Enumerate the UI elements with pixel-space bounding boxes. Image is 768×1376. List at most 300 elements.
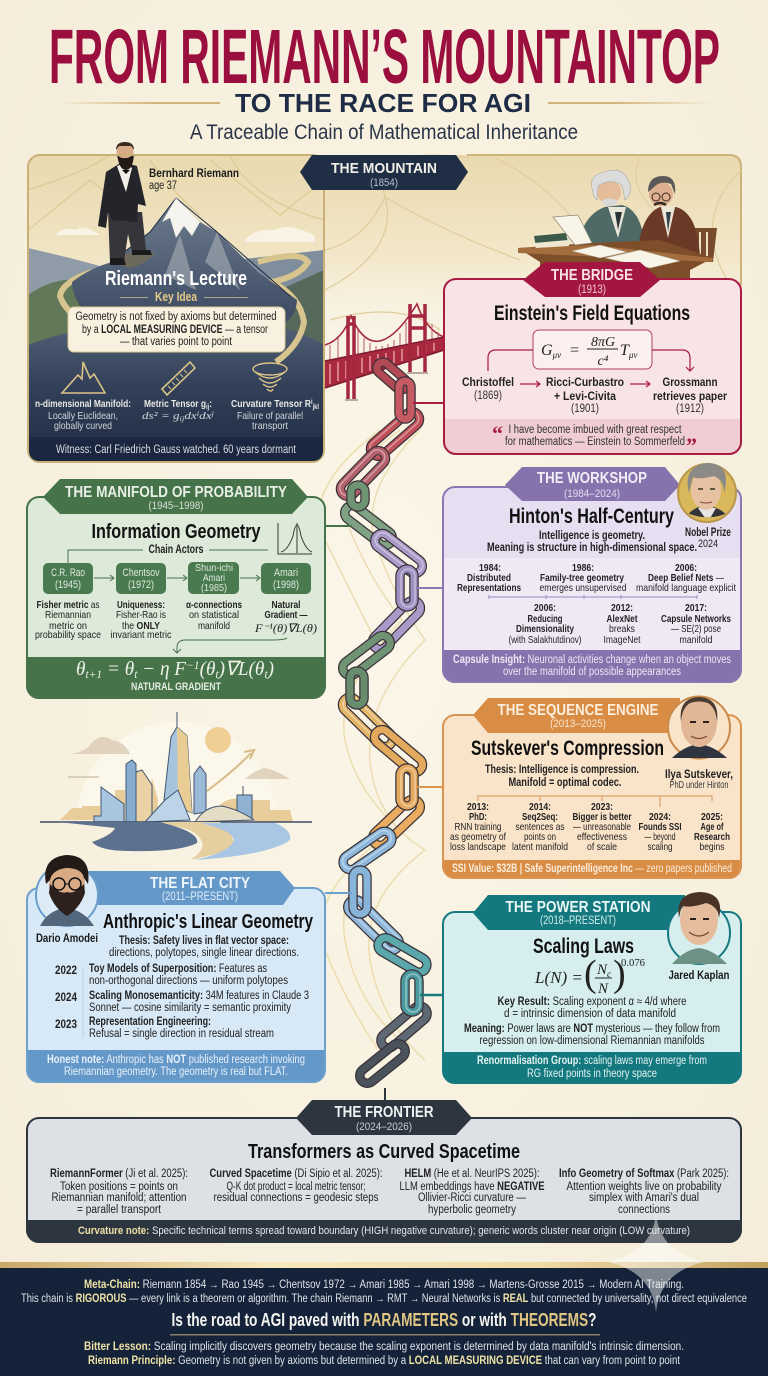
- desc: alpha connections: on statistical: [189, 609, 239, 621]
- event 2025: Age of: [700, 821, 724, 833]
- panel border: [28, 155, 324, 462]
- metric tensor label: j: [210, 410, 214, 418]
- label: Jared Kaplan: Jared Kaplan: [668, 968, 730, 982]
- actor arrows: [94, 575, 260, 581]
- entry 2022: non-orthogonal directions — uniform polytopes: [89, 975, 288, 987]
- witness band: [29, 437, 323, 461]
- link: green second: [340, 633, 393, 678]
- link: teal: [375, 935, 430, 975]
- paper: HELM: [400, 1168, 545, 1216]
- event 2006 belief nets: 2006:: [675, 562, 697, 574]
- distant skyline: [60, 778, 293, 822]
- arrow: [630, 381, 650, 387]
- link: purple vertical: [400, 569, 415, 607]
- actor: Chentsov: [116, 563, 166, 594]
- honest note band text: [47, 1054, 305, 1078]
- divider: [170, 1334, 600, 1336]
- desc: Fisher metric: probability space: [35, 629, 101, 641]
- papers: [553, 215, 592, 245]
- formula: (: [584, 953, 597, 995]
- connector: manifold: [325, 525, 352, 527]
- desc: alpha connections: [186, 599, 242, 632]
- manifold label: [35, 398, 131, 432]
- event 1984: Distributed: [467, 572, 511, 584]
- event 2013: 2013:: [467, 801, 489, 813]
- heading: Riemann's Lecture: [105, 268, 247, 290]
- footer: [0, 1262, 768, 1376]
- quote: “: [492, 421, 503, 446]
- key result: [498, 996, 686, 1020]
- equation box: 8πG: [591, 335, 615, 350]
- step: Christoffel: (1869): [474, 390, 502, 402]
- heading: Sutskever's Compression: [471, 737, 664, 760]
- badge: [88, 871, 295, 905]
- metric tensor label: dx: [184, 411, 197, 422]
- heading: Einstein's Field Equations: [494, 302, 690, 325]
- key idea box: — that varies point to point: [120, 336, 233, 348]
- workshop panel body: [443, 487, 741, 682]
- thesis: Meaning is structure in high-dimensional space.: [487, 540, 697, 554]
- quote: ”: [686, 433, 697, 458]
- formula band text: θ: [76, 658, 86, 680]
- curvature tensor label: Curvature Tensor R: [231, 398, 328, 410]
- paper: Info Geometry of Softmax: Info Geometry of Softmax (Park 2025):: [559, 1168, 729, 1180]
- manifold label: globally curved: [54, 420, 112, 432]
- step: Ricci-Curbastro: Ricci-Curbastro: [546, 375, 624, 389]
- step: Ricci-Curbastro: + Levi-Civita: [554, 389, 616, 403]
- panel: the bridge: [444, 262, 741, 458]
- event 2013: as geometry of: [450, 831, 506, 843]
- event 2023: [572, 801, 632, 853]
- thesis: [109, 935, 299, 959]
- connector: flat city: [325, 892, 352, 894]
- link: purple long: [369, 598, 424, 652]
- entry 2024: Scaling Monosemanticity: 34M features in Claude 3: [89, 990, 309, 1002]
- heading: Anthropic's Linear Geometry: [103, 910, 313, 933]
- capsule insight band text: over the manifold of possible appearances: [503, 666, 681, 678]
- paper: Info Geometry of Softmax: connections: [618, 1204, 670, 1216]
- Grossmann head: [649, 182, 673, 206]
- portrait: Kaplan: [668, 892, 730, 964]
- badge: the bridge: [523, 262, 660, 297]
- manifold panel body: [27, 497, 325, 698]
- sparkle glint: [608, 1214, 704, 1312]
- entry 2023: 2023: [55, 1017, 77, 1031]
- lower ground: [28, 318, 324, 462]
- boots: [110, 250, 152, 265]
- step: Christoffel: Christoffel: [462, 375, 514, 389]
- chain actors label: Chain Actors: [148, 544, 204, 556]
- quote: for mathematics — Einstein to Sommerfeld: [505, 436, 685, 448]
- formula band text: (θ: [200, 658, 216, 680]
- event 2014: [512, 801, 568, 853]
- equation box: μν: [628, 350, 637, 360]
- key result: d = intrinsic dimension of data manifold: [504, 1008, 676, 1020]
- badge: (1984–2024): [564, 488, 620, 500]
- equation box: =: [570, 342, 579, 359]
- equation box: c⁴: [597, 354, 609, 369]
- badge: (2024–2026): [356, 1121, 412, 1133]
- badge: [505, 467, 680, 501]
- capsule insight band text: [453, 654, 731, 678]
- desc: Fisher metric: Fisher metric as: [36, 599, 100, 611]
- paper: Curved Spacetime: [210, 1168, 382, 1204]
- desc: Natural Gradient: F⁻¹(θ)∇L(θ): [254, 621, 317, 635]
- paper: RiemannFormer: Token positions = points on: [60, 1181, 178, 1193]
- badge: the mountain: [300, 155, 468, 190]
- Grossmann jacket: [637, 207, 700, 258]
- actor: Shun-ichi Amari: Amari: [203, 572, 225, 584]
- illustration: flat city skyline: [40, 712, 312, 860]
- formula: L(N) =: [534, 968, 583, 987]
- actor: Chentsov: Chentsov: [122, 567, 160, 579]
- chain tail to frontier: [384, 1088, 386, 1104]
- link: rose: [337, 447, 389, 499]
- chain background ribbons: [319, 430, 425, 1060]
- paper: Curved Spacetime: Curved Spacetime (Di Sipio et al. 2025):: [210, 1168, 382, 1180]
- event 2012: 2012:: [611, 602, 633, 614]
- thesis: [485, 762, 639, 789]
- SSI band text: SSI Value: $32B | Safe Superintelligence Inc — zero papers published: [452, 863, 732, 875]
- honest note band text: Riemannian geometry. The geometry is real but FLAT.: [64, 1066, 288, 1078]
- portrait: Hinton: [678, 463, 736, 524]
- actor: Shun-ichi Amari: Shun-ichi: [195, 562, 233, 574]
- equation box: T: [620, 342, 629, 359]
- event 2013: [450, 801, 506, 853]
- desc: Natural Gradient: [254, 599, 317, 635]
- link: gray first: [378, 1003, 430, 1051]
- badge: (2011–PRESENT): [162, 891, 238, 903]
- equation box: [533, 330, 652, 369]
- link: orange second: [371, 727, 426, 775]
- desc: Natural Gradient: Natural: [272, 599, 301, 611]
- formula band text: )∇L(θ: [218, 658, 265, 680]
- event 2014: Seq2Seq:: [522, 811, 558, 823]
- left towers: [126, 760, 136, 822]
- desk: [518, 240, 713, 285]
- thesis: Thesis: Safety lives in flat vector space:: [119, 935, 289, 947]
- event 2024: [638, 811, 682, 853]
- meaning: Meaning: Power laws are NOT mysterious — they follow from: [464, 1023, 720, 1035]
- formula band text: −1: [186, 658, 200, 672]
- blue water: [195, 823, 290, 860]
- icon: manifold mountain: [62, 362, 105, 393]
- small right tower: [237, 786, 252, 818]
- event 2023: Bigger is better: [572, 811, 632, 823]
- icon: bell curve: [278, 523, 312, 554]
- event 2006 reducing: (with Salakhutdinov): [508, 634, 582, 646]
- desc: Uniqueness: invariant metric: [110, 629, 172, 641]
- thesis: Manifold = optimal codec.: [508, 775, 622, 789]
- portrait: Dario Amodei: [36, 855, 98, 926]
- badge: the mountain: (1854): [370, 177, 398, 189]
- entry 2024: 2024: [55, 990, 77, 1004]
- actor: C.R. Rao: (1945): [55, 579, 81, 591]
- bridge towers: [348, 304, 425, 400]
- event 2023: 2023:: [591, 801, 613, 813]
- link: green vertical: [351, 485, 365, 507]
- figure head (rises above panel): [116, 142, 134, 170]
- event 2006 belief nets: [636, 562, 736, 594]
- label: age: age 37: [149, 180, 177, 192]
- link: green: [342, 503, 395, 548]
- actor: Shun-ichi Amari: [188, 562, 239, 594]
- clouds: [70, 737, 290, 779]
- step: Ricci-Curbastro: (1901): [571, 403, 599, 415]
- event 1986: 1986:: [572, 562, 594, 574]
- paper: RiemannFormer: = parallel transport: [77, 1204, 162, 1216]
- curvature tensor label: i: [311, 399, 313, 406]
- entry 2022: 2022: [55, 963, 77, 977]
- entry 2023: [55, 1016, 274, 1040]
- renormalisation band text: [477, 1055, 707, 1080]
- books: [534, 233, 568, 247]
- event 1986: Family-tree geometry: [540, 572, 624, 584]
- glow: [77, 722, 277, 822]
- renormalisation band text: RG fixed points in theory space: [527, 1068, 657, 1080]
- label: Dario Amodei: Dario Amodei: [36, 931, 98, 945]
- link: orange vertical: [400, 768, 415, 806]
- connector: bridge: [413, 402, 444, 404]
- nobel label: Nobel Prize: [685, 527, 731, 539]
- event 2023: of scale: [587, 841, 617, 853]
- desc: Uniqueness: Uniqueness:: [117, 599, 165, 611]
- formula: [534, 953, 645, 997]
- link: blue first: [340, 828, 395, 873]
- event 2023: effectiveness: [577, 831, 627, 843]
- event 1986: [540, 562, 627, 594]
- event 1984: Representations: [457, 582, 521, 594]
- step: Christoffel: [462, 375, 514, 402]
- badge: [43, 479, 308, 514]
- formula band text: t: [215, 667, 219, 681]
- mountain panel body: [28, 155, 324, 462]
- heading rule right: [548, 102, 713, 104]
- event 2023: — unreasonable: [573, 821, 631, 833]
- paper: HELM: HELM (He et al. NeurIPS 2025):: [404, 1168, 540, 1180]
- name label: [665, 767, 733, 791]
- power panel body: [443, 912, 741, 1083]
- step: Grossmann: (1912): [676, 403, 704, 415]
- meaning: regression on low-dimensional Riemannian manifolds: [480, 1035, 705, 1047]
- badge: THE POWER STATION: [506, 899, 650, 916]
- event 2006 reducing: Dimensionality: [516, 623, 574, 635]
- event 2012: ImageNet: [604, 634, 641, 646]
- actor: Amari: [261, 563, 311, 594]
- desc: alpha connections: α-connections: [186, 599, 242, 611]
- bitter lesson: Bitter Lesson: Scaling implicitly discovers geometry because the scaling exponent is determined by data manifold's intrinsic dimension.: [84, 1341, 684, 1353]
- panel: the workshop: [443, 463, 741, 682]
- event 2025: 2025:: [701, 811, 723, 823]
- desc: Fisher metric: [35, 599, 101, 641]
- question: Is the road to AGI paved with PARAMETERS or with THEOREMS?: [172, 1309, 596, 1330]
- badge: the bridge: (1913): [578, 284, 606, 296]
- entry 2023: Representation Engineering:: [89, 1016, 211, 1028]
- chair: [695, 228, 717, 262]
- link: orange third: [370, 796, 423, 849]
- step: Grossmann: Grossmann: [662, 375, 718, 389]
- metric tensor label: ij: [180, 415, 184, 423]
- honest note band text: Honest note: Anthropic has NOT published research invoking: [47, 1054, 305, 1066]
- badge: THE MANIFOLD OF PROBABILITY: [65, 484, 288, 501]
- connector: sequence: [416, 786, 443, 788]
- arrow: [207, 750, 254, 791]
- desc: Uniqueness: the ONLY: [122, 620, 160, 632]
- event 2014: points on: [524, 831, 556, 843]
- dark road: [58, 822, 197, 851]
- portrait: Sutskever: [668, 696, 730, 758]
- desc: Uniqueness: Fisher-Rao is: [116, 609, 166, 621]
- paper: Info Geometry of Softmax: simplex with Amari's dual: [589, 1192, 699, 1204]
- event 2025: [694, 811, 730, 853]
- arrow to natural gradient formula: [173, 638, 287, 653]
- event 2024: Founds SSI: [638, 821, 682, 833]
- desc: Fisher metric: Riemannian: [45, 609, 91, 621]
- formula: ): [613, 953, 626, 995]
- event 2006 belief nets: manifold language explicit: [636, 582, 736, 594]
- icon: curvature tornado: [253, 363, 287, 391]
- main tower: [164, 712, 192, 813]
- equation box: G: [541, 342, 553, 359]
- formula band text: t+1: [85, 667, 102, 681]
- horizon: [40, 821, 312, 823]
- link: teal vertical: [405, 974, 420, 1012]
- curvature tensor label: transport: [252, 420, 288, 432]
- quote: [492, 421, 697, 458]
- bridge deck: [325, 337, 444, 388]
- link: red bridge link: [374, 360, 410, 392]
- gold stripe: [0, 1262, 768, 1268]
- event 2014: 2014:: [529, 801, 551, 813]
- tagline: A Traceable Chain of Mathematical Inheritance: [190, 121, 578, 144]
- renormalisation band text: Renormalisation Group: scaling laws may emerge from: [477, 1055, 707, 1067]
- formula band text: t: [134, 667, 138, 681]
- formula: c: [607, 969, 611, 979]
- actor: C.R. Rao: C.R. Rao: [51, 567, 85, 579]
- step: Grossmann: retrieves paper: [653, 389, 727, 403]
- thesis: [487, 528, 697, 554]
- event 2006 reducing: Reducing: [528, 613, 562, 625]
- badge: the bridge: THE BRIDGE: [551, 267, 633, 284]
- event 2014: sentences as: [516, 821, 564, 833]
- event 1984: 1984:: [479, 562, 501, 574]
- event 2017: — SE(2) pose: [671, 623, 721, 635]
- event 2012: [604, 602, 641, 646]
- witness band: Witness: Carl Friedrich Gauss watched. 60 years dormant: [56, 444, 297, 456]
- desc: Fisher metric: metric on: [49, 620, 87, 632]
- panel: the manifold of probability: [27, 479, 325, 698]
- formula band text: = θ: [102, 658, 134, 680]
- paper: Curved Spacetime: Q-K dot product = local metric tensor;: [226, 1181, 366, 1193]
- actor: Amari: (1998): [273, 579, 299, 591]
- nobel label: 2024: [698, 538, 718, 550]
- event 2012: AlexNet: [606, 613, 638, 625]
- paper: RiemannFormer: [50, 1168, 188, 1216]
- metric tensor label: ij: [206, 404, 209, 411]
- key idea heading: Key Idea: [155, 290, 198, 304]
- timeline rule: [489, 595, 697, 599]
- actor: Shun-ichi Amari: (1985): [201, 582, 227, 594]
- timeline rule: [478, 796, 712, 807]
- illustration: Einstein and Grossmann at desk: [518, 170, 717, 285]
- dome: [195, 806, 254, 822]
- sub heading: TO THE RACE FOR AGI: [235, 88, 531, 118]
- event 2012: breaks: [609, 623, 635, 635]
- clouds: [55, 227, 315, 242]
- badge: THE FLAT CITY: [150, 875, 250, 892]
- panel: the mountain: [28, 142, 324, 462]
- connector: workshop: [416, 587, 443, 589]
- event 2024: 2024:: [649, 811, 671, 823]
- badge: THE WORKSHOP: [537, 470, 647, 487]
- thesis: Thesis: Intelligence is compression.: [485, 762, 639, 776]
- panel: the power station: [443, 892, 741, 1083]
- curvature tensor label: [231, 398, 319, 432]
- bridge panel body: [444, 279, 741, 454]
- icon: ruler: [162, 362, 195, 395]
- front crystal: [145, 790, 190, 822]
- badge: THE FRONTIER: [334, 1104, 434, 1121]
- gold road: [160, 822, 233, 860]
- chain of links: [337, 360, 430, 1104]
- badge: THE SEQUENCE ENGINE: [498, 702, 658, 719]
- paper: Info Geometry of Softmax: [559, 1168, 729, 1216]
- heading: Transformers as Curved Spacetime: [248, 1141, 520, 1163]
- Einstein head: [597, 180, 621, 204]
- paper: RiemannFormer: RiemannFormer (Ji et al. 2025):: [50, 1168, 188, 1180]
- event 2017: 2017:: [685, 602, 707, 614]
- entry 2022: [55, 963, 288, 987]
- event 2006 belief nets: Deep Belief Nets —: [648, 572, 724, 584]
- heading: Scaling Laws: [533, 935, 634, 958]
- entry 2023: Refusal = single direction in residual stream: [89, 1028, 274, 1040]
- entry 2024: [55, 990, 309, 1014]
- legs: [108, 212, 146, 262]
- footer background: [0, 1268, 768, 1376]
- name label: Ilya Sutskever,: [665, 767, 733, 781]
- event 2014: latent manifold: [512, 841, 568, 853]
- title: [49, 14, 720, 144]
- heading rule left: [56, 102, 220, 104]
- actor: C.R. Rao: [43, 563, 93, 594]
- event 1984: [457, 562, 521, 594]
- hills: [29, 248, 100, 294]
- badge: [296, 1100, 472, 1135]
- paper: HELM: LLM embeddings have NEGATIVE: [400, 1181, 545, 1193]
- badge: [473, 698, 680, 733]
- heading: Hinton's Half-Century: [509, 505, 674, 528]
- link: gray last: [357, 1041, 408, 1086]
- riemann principle: Riemann Principle: Geometry is not given by axioms but determined by a LOCAL MEASURING DEVICE that can vary from point to point: [88, 1355, 681, 1367]
- timeline spine: [82, 967, 84, 1038]
- link: blue vertical: [353, 870, 367, 914]
- tower right: [194, 766, 206, 814]
- step: Ricci-Curbastro: [546, 375, 624, 415]
- manifold label: Locally Euclidean,: [48, 410, 118, 422]
- key idea box: [68, 307, 285, 352]
- sun: [205, 727, 231, 753]
- nobel label: [685, 527, 731, 550]
- link: red long: [367, 408, 423, 459]
- event 1986: emerges unsupervised: [540, 582, 627, 594]
- connector: power: [420, 994, 443, 996]
- entry 2024: Sonnet — cosine similarity = semantic proximity: [89, 1002, 291, 1014]
- chain actors label: [68, 544, 268, 563]
- thesis: Intelligence is geometry.: [539, 528, 645, 542]
- equation connectors: [488, 350, 694, 371]
- name label: PhD under Hinton: [670, 780, 728, 791]
- metric tensor label: Metric Tensor g: [144, 398, 221, 410]
